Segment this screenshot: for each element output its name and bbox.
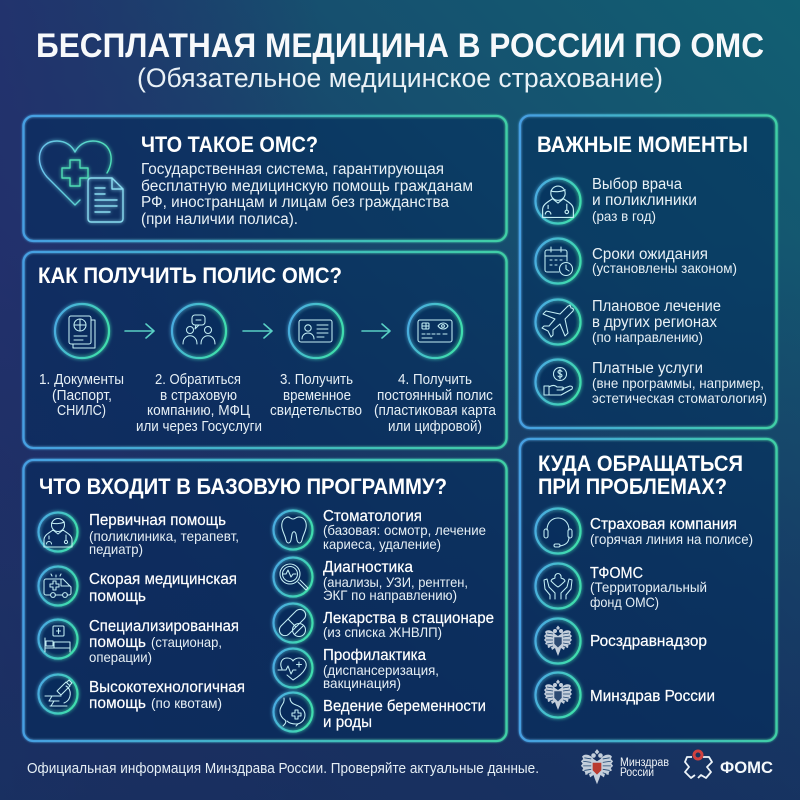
text: prevention: (диспансеризация, xyxy=(323,663,439,678)
heading xyxy=(538,451,743,499)
text: TFOMS: ТФОМС xyxy=(590,565,643,582)
text: specialized care: Специализированная xyxy=(89,618,239,635)
text: treatment in other regions: в других регионах xyxy=(592,314,717,331)
icon: primary care doctor xyxy=(38,512,78,552)
text: specialized care xyxy=(89,618,239,665)
panel: куда обращаться xyxy=(520,439,776,741)
icon: airplane xyxy=(536,300,580,344)
arrow xyxy=(362,324,390,338)
panel: важные моменты xyxy=(520,116,776,428)
text: high tech care: (по квотам) xyxy=(151,696,222,711)
panel: как получить полис xyxy=(24,252,506,448)
text: ambulance xyxy=(89,571,237,605)
logo: Минздрав России: Минздрав xyxy=(620,757,669,769)
icon: pregnancy xyxy=(274,692,312,732)
text: ambulance: Скорая медицинская xyxy=(89,571,237,588)
heading: ЧТО ТАКОЕ ОМС? xyxy=(141,132,318,157)
step 2 caption: в страховую xyxy=(160,388,237,404)
text: waiting times: Сроки ожидания xyxy=(592,246,708,263)
icon: heart prevention xyxy=(274,648,312,688)
arrow xyxy=(125,324,154,338)
description xyxy=(141,161,473,228)
text: diagnostics: Диагностика xyxy=(323,559,413,576)
text: high tech care: помощь xyxy=(89,695,146,712)
icon: magnifier diagnostics xyxy=(274,558,312,596)
footer note: Официальная информация Минздрава России. Проверяйте актуальные данные. xyxy=(27,760,539,777)
text: paid services: эстетическая стоматология) xyxy=(592,391,767,406)
text: dentistry xyxy=(323,508,486,552)
text: insurance company: Страховая компания xyxy=(590,516,737,533)
subtitle: (Обязательное медицинское страхование) xyxy=(137,63,663,93)
step 2 caption: 2. Обратиться xyxy=(155,372,241,388)
step 1 caption xyxy=(39,372,124,419)
text: treatment in other regions: Плановое лечение xyxy=(592,298,721,315)
icon: emblem Minzdrav xyxy=(536,672,580,718)
step 1 caption: СНИЛС) xyxy=(57,403,106,419)
text: waiting times xyxy=(592,246,737,276)
text: Minzdrav: Минздрав России xyxy=(590,688,715,705)
text: doctor choice: (раз в год) xyxy=(592,209,656,224)
step 1 caption: (Паспорт, xyxy=(52,388,112,404)
text: prevention xyxy=(323,647,439,691)
text: primary care xyxy=(89,512,239,557)
panel: что такое ОМС xyxy=(24,116,506,241)
step 1 icon: passport xyxy=(55,304,109,358)
step 3 caption: свидетельство xyxy=(270,403,362,419)
heading: ВАЖНЫЕ МОМЕНТЫ xyxy=(537,132,748,157)
title: БЕСПЛАТНАЯ МЕДИЦИНА В РОССИИ ПО ОМС xyxy=(36,27,764,65)
arrow xyxy=(243,324,272,338)
text: insurance company xyxy=(590,516,753,547)
text: pregnancy xyxy=(323,698,486,731)
icon: heart with document xyxy=(39,141,123,222)
icon: hands and people xyxy=(536,564,580,608)
description: Государственная система, гарантирующая xyxy=(141,161,444,178)
text: diagnostics: (анализы, УЗИ, рентген, xyxy=(323,575,468,590)
text: prevention: вакцинация) xyxy=(323,676,401,691)
text: high tech care xyxy=(89,679,245,712)
description: РФ, иностранцам и лицам без гражданства xyxy=(141,194,449,211)
logo: ФОМС: ФОМС xyxy=(720,758,773,777)
text: medicines: Лекарства в стационаре xyxy=(323,610,494,627)
icon: doctor choice xyxy=(536,178,580,224)
text: pregnancy: и роды xyxy=(323,714,372,731)
text: paid services xyxy=(592,360,767,406)
step 4 caption xyxy=(374,372,497,435)
text: dentistry: кариеса, удаление) xyxy=(323,537,441,552)
icon: paid services xyxy=(536,360,580,404)
text: doctor choice: Выбор врача xyxy=(592,176,682,193)
text: medicines: (из списка ЖНВЛП) xyxy=(323,625,442,640)
icon: microscope xyxy=(38,674,78,714)
panel: базовая программа xyxy=(24,460,506,741)
text: doctor choice xyxy=(592,176,697,224)
text: waiting times: (установлены законом) xyxy=(592,261,737,276)
step 3 caption xyxy=(270,372,362,419)
heading: КУДА ОБРАЩАТЬСЯ xyxy=(538,451,743,476)
icon: headset xyxy=(536,508,580,554)
text: treatment in other regions xyxy=(592,298,721,345)
step 2 icon: people and chat xyxy=(172,304,226,358)
text: primary care: (поликлиника, терапевт, xyxy=(89,529,239,544)
text: TFOMS: (Территориальный xyxy=(590,580,707,595)
step 2 caption: или через Госуслуги xyxy=(136,419,262,435)
logo: ФОМС xyxy=(685,751,773,778)
text: primary care: Первичная помощь xyxy=(89,512,226,529)
text: specialized care: операции) xyxy=(89,650,152,665)
text: primary care: педиатр) xyxy=(89,542,143,557)
step 3 caption: временное xyxy=(283,388,351,404)
step 4 caption: 4. Получить xyxy=(398,372,472,388)
logo: Минздрав России xyxy=(581,749,669,784)
icon: ambulance xyxy=(38,566,78,606)
text: paid services: (вне программы, например, xyxy=(592,376,764,391)
text: dentistry: (базовая: осмотр, лечение xyxy=(323,523,486,538)
text: dentistry: Стоматология xyxy=(323,508,422,525)
icon: tooth xyxy=(274,510,312,550)
step 2 caption xyxy=(136,372,262,435)
icon: hospital bed xyxy=(38,620,78,658)
heading: ПРИ ПРОБЛЕМАХ? xyxy=(538,474,727,499)
text: medicines xyxy=(323,610,494,640)
step 4 icon: policy card xyxy=(408,304,462,358)
text: treatment in other regions: (по направлению) xyxy=(592,330,703,345)
step 4 caption: или цифровой) xyxy=(388,419,482,435)
heading: КАК ПОЛУЧИТЬ ПОЛИС ОМС? xyxy=(38,263,342,288)
step 4 caption: (пластиковая карта xyxy=(374,403,497,419)
text: Roszdravnadzor: Росздравнадзор xyxy=(590,633,707,650)
description: (при наличии полиса). xyxy=(141,211,298,228)
icon: emblem Roszdravnadzor xyxy=(536,618,580,664)
text: diagnostics: ЭКГ по направлению) xyxy=(323,588,457,603)
text: specialized care: (стационар, xyxy=(151,635,222,650)
logo: Минздрав России: России xyxy=(620,767,654,779)
text: paid services: Платные услуги xyxy=(592,360,703,377)
text: high tech care: Высокотехнологичная xyxy=(89,679,245,696)
text: specialized care: помощь xyxy=(89,634,146,651)
text: ambulance: помощь xyxy=(89,588,146,605)
text: pregnancy: Ведение беременности xyxy=(323,698,486,715)
step 4 caption: постоянный полис xyxy=(377,388,493,404)
step 2 caption: компанию, МФЦ xyxy=(147,403,250,419)
text: TFOMS xyxy=(590,565,707,610)
heading: ЧТО ВХОДИТ В БАЗОВУЮ ПРОГРАММУ? xyxy=(39,474,447,499)
icon: calendar and clock xyxy=(536,238,580,284)
text: diagnostics xyxy=(323,559,468,603)
step 3 icon: id certificate xyxy=(289,304,343,358)
text: insurance company: (горячая линия на полисе) xyxy=(590,532,753,547)
icon: pills xyxy=(274,604,312,642)
text: doctor choice: и поликлиники xyxy=(592,192,697,209)
text: TFOMS: фонд ОМС) xyxy=(590,595,659,610)
description: бесплатную медицинскую помощь гражданам xyxy=(141,178,473,195)
text: prevention: Профилактика xyxy=(323,647,426,664)
step 3 caption: 3. Получить xyxy=(280,372,353,388)
step 1 caption: 1. Документы xyxy=(39,372,124,388)
